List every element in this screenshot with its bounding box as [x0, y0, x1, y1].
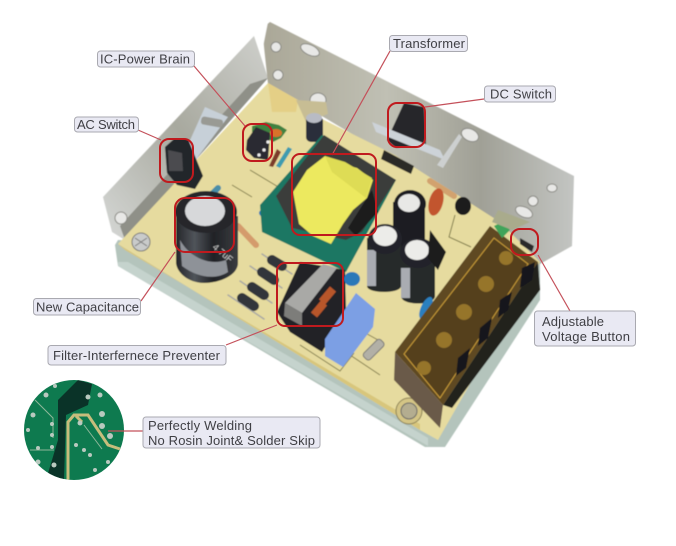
filter choke	[277, 262, 346, 352]
label: New Capacitance: New Capacitance	[36, 300, 139, 314]
label: IC-Power Brain: IC-Power Brain	[100, 52, 190, 66]
label: DC Switch: DC Switch	[490, 86, 552, 102]
label: Perfectly Welding	[143, 417, 320, 448]
label: Filter-Interfernece Preventer: Filter-Interfernece Preventer	[53, 348, 221, 363]
label: AC Switch: AC Switch	[77, 117, 135, 132]
silkscreen traces	[232, 170, 471, 375]
left wall	[103, 36, 268, 240]
ac heatsink and switch	[182, 107, 228, 170]
right capacitors	[367, 187, 471, 321]
label: Adjustable Voltage Button	[534, 311, 636, 346]
terminal block	[394, 222, 540, 428]
label: Adjustable Voltage Button: Voltage Button	[542, 329, 630, 344]
ic chip	[252, 122, 287, 142]
rear transistors	[387, 103, 426, 148]
small upper electrolytic	[306, 116, 323, 142]
leader lines	[108, 51, 570, 431]
big capacitor: 4.7uF	[211, 242, 235, 265]
chassis base	[115, 240, 540, 447]
big capacitor	[175, 191, 238, 283]
inset pcb circle	[24, 380, 124, 480]
stripe panel	[492, 210, 530, 230]
power supply photo	[103, 22, 574, 447]
screws	[132, 233, 150, 251]
pcb board	[118, 83, 540, 440]
fuse	[362, 338, 385, 361]
back wall	[262, 22, 574, 264]
resistors	[182, 181, 454, 245]
red highlight boxes	[160, 103, 538, 326]
label: Adjustable Voltage Button: Adjustable	[542, 314, 604, 329]
label: Perfectly Welding: Perfectly Welding	[148, 418, 252, 433]
label: Perfectly Welding: No Rosin Joint& Solder Skip	[148, 433, 315, 448]
wall holes	[115, 41, 557, 224]
blue x capacitor	[325, 293, 375, 367]
transformer	[260, 135, 396, 272]
label: Transformer: Transformer	[393, 36, 466, 51]
diodes	[228, 254, 292, 319]
